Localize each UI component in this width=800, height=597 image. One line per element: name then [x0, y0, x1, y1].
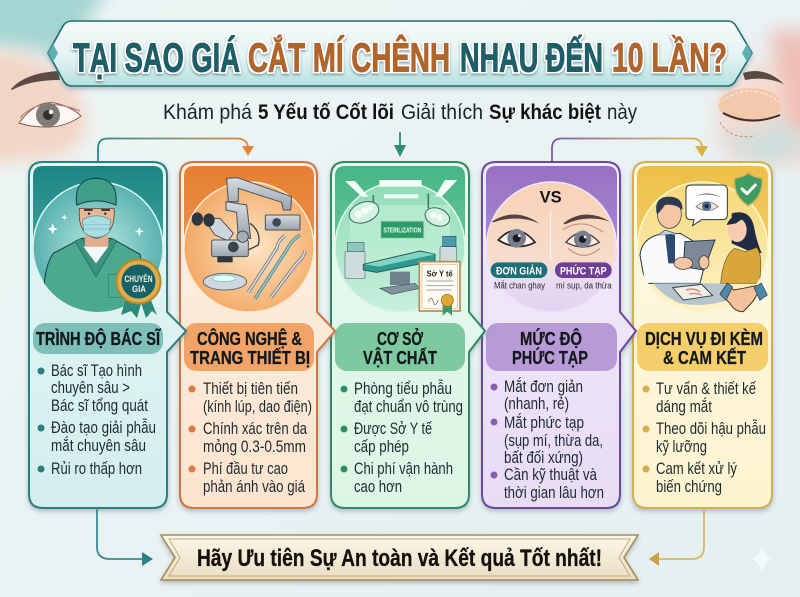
subtitle: Khám phá — [163, 101, 252, 124]
heading pill: CÔNG NGHỆ & — [197, 328, 302, 349]
title text: CẮT MÍ CHÊNH — [248, 34, 450, 80]
label: simple: ĐƠN GIẢN — [496, 264, 542, 277]
bullet list: Tư vấn & thiết kế — [656, 380, 756, 398]
bullet list: biến chứng — [656, 478, 722, 496]
bullet list: Bác sĩ Tạo hình — [51, 362, 142, 380]
title text: 10 LẦN? — [612, 34, 727, 80]
sparkle — [751, 545, 772, 574]
bullet list — [188, 380, 312, 496]
heading pill — [335, 323, 465, 371]
label: complex: mí sụp, da thừa — [556, 281, 612, 291]
arrow: doctor to technology — [98, 138, 254, 161]
bullet list: Rủi ro thấp hơn — [51, 460, 142, 478]
label: complex — [555, 262, 612, 291]
bullet list — [340, 379, 463, 496]
heading pill — [33, 323, 163, 354]
heading pill — [486, 323, 617, 371]
subtitle: 5 Yếu tố Cốt lõi — [258, 101, 394, 124]
title text — [73, 34, 727, 80]
bullet list: Được Sở Y tế — [354, 420, 432, 438]
bullet list: Phòng tiểu phẫu — [354, 379, 452, 398]
title text: TẠI SAO GIÁ — [73, 34, 240, 80]
label: VS: VS — [540, 187, 562, 206]
bullet list — [38, 362, 156, 478]
icon: expert badge — [116, 260, 160, 318]
label: simple — [491, 262, 547, 291]
illustration: open eye, left corner — [0, 0, 110, 164]
bullet list: Cần kỹ thuật và — [504, 466, 598, 484]
call to action banner — [161, 535, 638, 580]
icon: speech bubble with eye — [686, 185, 727, 226]
panel: services and commitment — [633, 162, 772, 508]
panel: technology and equipment — [180, 162, 335, 508]
bullet list: bất đối xứng) — [504, 449, 583, 467]
arrow: complexity to services — [552, 138, 708, 161]
bullet list: Chi phí vận hành — [354, 460, 453, 478]
bullet list: (nhanh, rẻ) — [504, 395, 569, 413]
heading pill — [184, 323, 314, 371]
bullet list: Theo dõi hậu phẫu — [656, 419, 766, 438]
heading pill: & CAM KẾT — [663, 347, 747, 368]
title banner — [48, 21, 752, 86]
bullet list: Bác sĩ tổng quát — [51, 397, 148, 415]
bullet list: Phí đầu tư cao — [203, 460, 288, 478]
image header: eye comparison — [486, 166, 617, 316]
panel: facilities — [331, 162, 485, 508]
icon: certificate: Sở Y tế — [427, 269, 453, 278]
heading pill: DỊCH VỤ ĐI KÈM — [645, 328, 763, 349]
heading pill: CƠ SỞ — [377, 328, 423, 349]
heading pill — [637, 323, 768, 371]
illustration: closed eye with surgical markings, right corner — [716, 30, 800, 168]
label: complex: PHỨC TẠP — [560, 264, 607, 277]
panel: doctor qualification — [29, 162, 186, 508]
bullet list: (kính lúp, dao điện) — [203, 398, 312, 416]
bullet list: thời gian lâu hơn — [504, 484, 604, 502]
bullet list — [642, 380, 766, 496]
subtitle: Sự khác biệt — [489, 101, 601, 124]
heading pill: PHỨC TẠP — [512, 347, 588, 368]
bullet list: (sụp mí, thừa da, — [504, 432, 603, 450]
arrow: center down — [394, 132, 406, 157]
banner text: Hãy Ưu tiên Sự An toàn và Kết quả Tốt nhất! — [197, 545, 602, 572]
icon: expert badge: GIA — [132, 284, 146, 294]
bullet list: mắt chuyên sâu — [51, 436, 146, 455]
bullet list: kỹ lưỡng — [656, 438, 707, 456]
arrow: left to banner — [97, 508, 153, 566]
subtitle: Giải thích — [401, 101, 483, 124]
bullet list: Chính xác trên da — [203, 420, 308, 438]
icon: handshake — [720, 283, 767, 312]
bullet list: Cam kết xử lý — [656, 460, 738, 478]
bullet list — [490, 377, 604, 502]
panel: complexity — [482, 162, 636, 508]
heading pill: VẬT CHẤT — [363, 347, 438, 368]
bullet list: cao hơn — [354, 478, 402, 496]
bullet list: chuyên sâu > — [51, 379, 130, 397]
bullet list: cấp phép — [354, 438, 409, 456]
bullet list: đạt chuẩn vô trùng — [354, 398, 463, 416]
bullet list: Thiết bị tiên tiến — [203, 380, 298, 398]
bullet list: dáng mắt — [656, 397, 712, 416]
bullet list: mỏng 0.3-0.5mm — [203, 438, 306, 456]
image header: surgeon — [33, 166, 163, 316]
image header: microscope and tools — [184, 166, 314, 316]
arrow: right to banner — [649, 508, 704, 566]
title text: NHAU ĐẾN — [460, 34, 603, 80]
bullet list: Đào tạo giải phẫu — [51, 418, 156, 437]
bullet list: phản ánh vào giá — [203, 478, 306, 496]
icon: expert badge: CHUYÊN — [124, 273, 152, 284]
heading pill: TRÌNH ĐỘ BÁC SĨ — [36, 328, 161, 349]
subtitle — [163, 101, 637, 124]
icon: shield check — [735, 173, 762, 206]
subtitle: này — [607, 101, 637, 124]
sign: sterilization: STERILIZATION — [383, 227, 421, 234]
heading pill: TRANG THIẾT BỊ — [190, 347, 310, 368]
image header: operating room — [335, 166, 465, 316]
label: simple: Mắt chan ghay — [494, 281, 545, 291]
heading pill: MỨC ĐỘ — [520, 328, 582, 349]
bullet list: Mắt đơn giản — [504, 377, 583, 396]
image header: consultation — [637, 166, 768, 316]
bullet list: Mắt phức tạp — [504, 413, 584, 432]
